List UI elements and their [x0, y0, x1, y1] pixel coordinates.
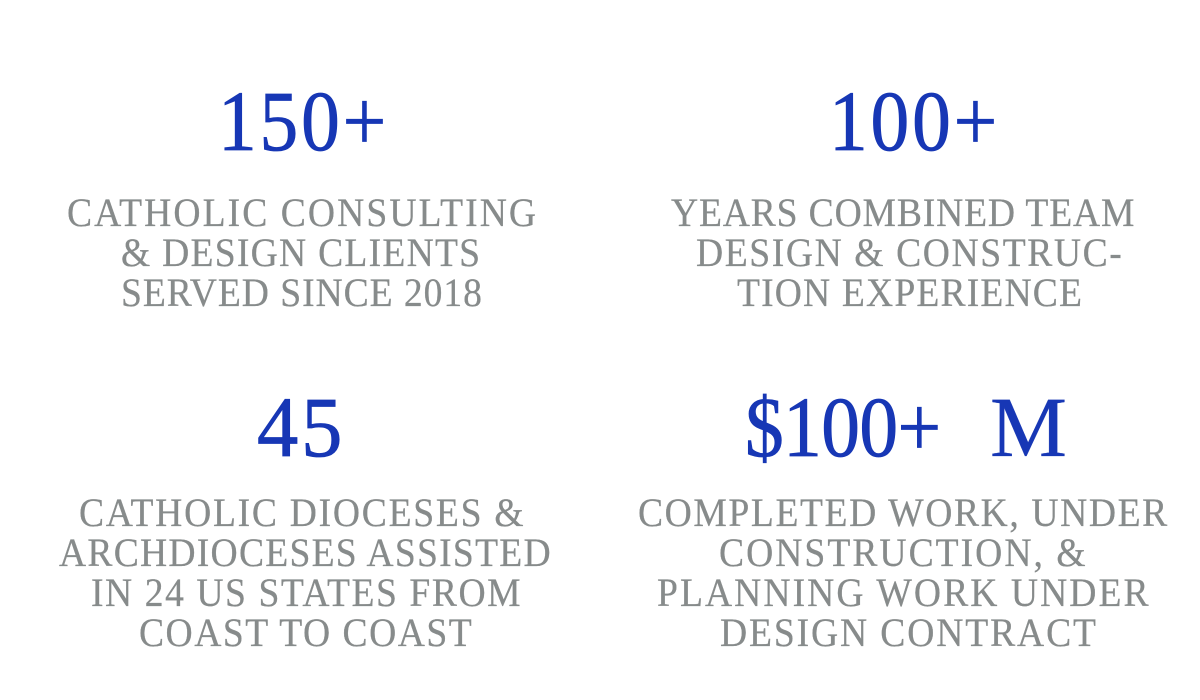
text block: clients description: & DESIGN CLIENTS [121, 231, 480, 275]
text block: project value description: PLANNING WORK UNDER [657, 571, 1149, 615]
panel: years of experience [671, 73, 1134, 315]
text block: dioceses description: ARCHDIOCESES ASSISTED [59, 531, 551, 575]
text block: project value description: COMPLETED WORK, UNDER [638, 491, 1167, 535]
number: 45: 45 [257, 381, 342, 475]
text block: clients description [67, 191, 536, 315]
number: 150+: 150+ [218, 73, 386, 169]
panel: project value [638, 379, 1167, 655]
text block: clients description: SERVED SINCE 2018 [121, 271, 482, 315]
text block: experience description: YEARS COMBINED TEAM [671, 191, 1134, 235]
panel: dioceses assisted [59, 381, 551, 655]
text block: dioceses description: CATHOLIC DIOCESES & [79, 491, 524, 535]
text block: dioceses description: COAST TO COAST [139, 611, 472, 655]
text block: experience description: TION EXPERIENCE [737, 271, 1082, 315]
number: 100+: 100+ [829, 73, 997, 169]
number: $100+ M: M [990, 379, 1067, 475]
number: $100+ M [745, 379, 1067, 475]
text block: dioceses description: IN 24 US STATES FROM [91, 571, 521, 615]
text block: experience description [671, 191, 1134, 315]
text block: clients description: CATHOLIC CONSULTING [67, 191, 536, 235]
text block: project value description: CONSTRUCTION, & [719, 531, 1086, 575]
text block: dioceses description [59, 491, 551, 655]
text block: project value description [638, 491, 1167, 655]
panel: clients served [67, 73, 536, 315]
text block: experience description: DESIGN & CONSTRUC- [696, 231, 1122, 275]
text block: project value description: DESIGN CONTRACT [720, 611, 1096, 655]
number: $100+ M: $100+ [745, 379, 941, 475]
